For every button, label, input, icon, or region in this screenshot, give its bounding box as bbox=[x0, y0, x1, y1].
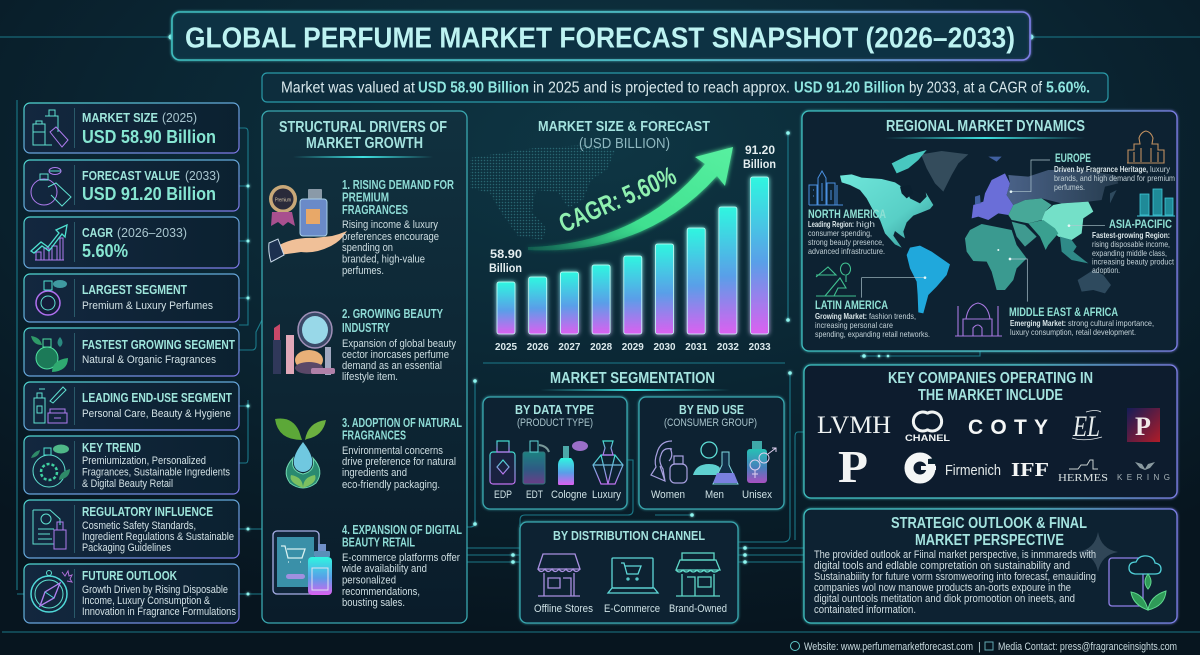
axis labels: 2032 bbox=[717, 341, 739, 353]
driver 4: wide availability and bbox=[341, 563, 427, 575]
driver 4: E-commerce platforms offer bbox=[342, 552, 460, 564]
driver 1: perfumes. bbox=[342, 265, 384, 277]
panel: regional market dynamics: ASIA-PACIFIC bbox=[1109, 219, 1172, 231]
logo: G mark bbox=[909, 457, 936, 479]
panel: key companies bbox=[804, 365, 1177, 498]
card: key trend: Premiumization, Personalized bbox=[82, 455, 206, 467]
panel: regional market dynamics: NORTH AMERICA bbox=[808, 209, 886, 221]
card: CAGR: CAGR bbox=[82, 226, 113, 240]
chart: market size and forecast: MARKET SIZE & FORECAST bbox=[538, 118, 710, 135]
driver 4: recommendations, bbox=[342, 586, 420, 598]
panel: by end use: Unisex bbox=[742, 489, 773, 501]
icon: e-commerce laptop bbox=[608, 558, 658, 593]
logo: Firmenich: Firmenich bbox=[945, 462, 1001, 479]
driver 1: Rising income & luxury bbox=[342, 219, 438, 231]
summary banner: by 2033, at a CAGR of bbox=[909, 80, 1043, 96]
panel: regional market dynamics: Growing Market: bbox=[815, 311, 867, 321]
driver 3: Environmental concerns bbox=[342, 445, 443, 457]
panel: regional market dynamics: brands, and high demand for premium bbox=[1054, 173, 1175, 183]
panel: regional market dynamics: REGIONAL MARKET DYNAMICS bbox=[886, 118, 1085, 135]
driver 2: 2. GROWING BEAUTY bbox=[342, 307, 444, 321]
card: forecast value: FORECAST VALUE bbox=[82, 169, 180, 183]
driver 3: eco-friendly packaging. bbox=[342, 479, 440, 491]
panel: by data type: Luxury bbox=[592, 489, 622, 501]
card: future outlook: Innovation in Fragrance Formulations bbox=[82, 606, 237, 618]
panel: regional market dynamics: increasing beauty product bbox=[1092, 256, 1175, 266]
driver 2: cector inorcases perfume bbox=[342, 349, 449, 361]
panel: regional market dynamics: consumer spending, bbox=[808, 228, 872, 238]
panel: regional market dynamics: increasing personal care bbox=[815, 320, 893, 330]
icon: unisex bbox=[747, 441, 776, 483]
driver 2 bbox=[273, 307, 456, 383]
footer contact bar: | bbox=[978, 641, 981, 653]
panel: strategic outlook: The provided outlook ar Fiinal market perspective, is inmmareds with bbox=[814, 549, 1096, 561]
logo: Chanel bbox=[905, 412, 950, 444]
driver 3: drive preference for natural bbox=[342, 456, 456, 468]
logo: Kering: KERING bbox=[1117, 473, 1170, 482]
driver 3 bbox=[275, 416, 462, 491]
panel: strategic outlook: Sustainabiiity for future vorm ssromweoring into forecast, emauiding bbox=[814, 571, 1096, 583]
driver 1: FRAGRANCES bbox=[342, 203, 408, 217]
panel: by data type: EDP bbox=[494, 489, 512, 501]
axis labels: 2025 bbox=[495, 341, 517, 353]
card: regulatory influence: REGULATORY INFLUENCE bbox=[82, 505, 213, 519]
panel: strategic outlook: STRATEGIC OUTLOOK & FINAL bbox=[891, 515, 1087, 532]
logo: Hermes bbox=[1058, 460, 1108, 484]
footer contact bar: Website: www.perfumemarketforecast.com bbox=[804, 641, 973, 653]
panel: market segmentation: MARKET SEGMENTATION bbox=[550, 370, 715, 387]
value labels: 91.20 bbox=[745, 143, 775, 157]
icon: EDT bottle bbox=[523, 441, 549, 484]
driver 3: FRAGRANCES bbox=[342, 428, 406, 442]
icon: EDP bottle bbox=[490, 441, 515, 484]
world map bbox=[840, 150, 1118, 313]
icon: leaf and water drop bbox=[275, 418, 326, 488]
footer contact bar bbox=[790, 641, 1177, 653]
card: key trend bbox=[24, 436, 239, 494]
driver 2: Expansion of global beauty bbox=[342, 338, 456, 350]
panel: regional market dynamics: expanding middle class, bbox=[1092, 248, 1167, 258]
panel: regional market dynamics: MIDDLE EAST & AFRICA bbox=[1009, 307, 1118, 319]
chart: market size and forecast bbox=[470, 118, 778, 353]
card: forecast value: USD 91.20 Billion bbox=[82, 184, 216, 204]
panel: by end use: BY END USE bbox=[679, 403, 744, 417]
card: future outlook: FUTURE OUTLOOK bbox=[82, 569, 177, 583]
panel: by data type: Cologne bbox=[551, 489, 587, 501]
driver 4: 4. EXPANSION OF DIGITAL bbox=[342, 523, 462, 537]
logo: Kering bbox=[1117, 462, 1170, 482]
driver 4: personalized bbox=[342, 574, 396, 586]
icon: asia skyline bbox=[1140, 189, 1173, 215]
axis labels: 2031 bbox=[685, 341, 707, 353]
panel: strategic outlook: digital ountools metitation and diok promootion on ineets, and bbox=[814, 593, 1075, 605]
driver 1: preferences encourage bbox=[342, 231, 439, 243]
icon: brand-owned store bbox=[676, 553, 720, 596]
logo: Hermes: HERMES bbox=[1058, 473, 1108, 484]
logo: IFF: IFF bbox=[1011, 459, 1049, 481]
driver 1: spending on bbox=[342, 242, 393, 254]
panel: regional market dynamics: spending, expanding retail networks. bbox=[815, 329, 930, 339]
icon: women bbox=[651, 441, 687, 483]
card: fastest growing: Natural & Organic Fragrances bbox=[82, 354, 217, 366]
panel: by end use: Men bbox=[705, 489, 724, 501]
panel: strategic outlook: containated information. bbox=[814, 604, 916, 616]
logo: P box: P bbox=[1135, 412, 1151, 441]
icon: offline store bbox=[538, 554, 580, 596]
panel: regional market dynamics: Driven by Fragrance Heritage, bbox=[1054, 164, 1148, 174]
card: leading end-use: LEADING END-USE SEGMENT bbox=[82, 391, 232, 405]
logo: EL monogram: EL bbox=[1072, 410, 1100, 443]
driver 2: lifestyle item. bbox=[342, 371, 398, 383]
card: market size: USD 58.90 Billion bbox=[82, 127, 216, 147]
icon: men bbox=[693, 442, 738, 484]
axis labels: 2029 bbox=[622, 341, 644, 353]
axis labels: 2028 bbox=[590, 341, 612, 353]
driver 4: BEAUTY RETAIL bbox=[342, 536, 415, 550]
logo: P box bbox=[1127, 408, 1160, 442]
panel: structural drivers: STRUCTURAL DRIVERS OF bbox=[279, 119, 447, 136]
driver 1: 1. RISING DEMAND FOR bbox=[342, 178, 454, 192]
card: regulatory influence: Ingredient Regulations & Sustainable bbox=[82, 531, 234, 543]
logo: large P: P bbox=[838, 441, 868, 492]
summary banner: USD 58.90 Billion bbox=[418, 80, 529, 96]
card: future outlook: Income, Luxury Consumption & bbox=[82, 595, 211, 607]
card: CAGR: (2026–2033) bbox=[117, 226, 187, 240]
panel: regional market dynamics: adoption. bbox=[1092, 265, 1120, 275]
driver 1 bbox=[269, 178, 454, 277]
panel: strategic outlook bbox=[804, 509, 1177, 623]
driver 4: bousting sales. bbox=[342, 597, 405, 609]
axis labels: 2027 bbox=[558, 341, 581, 353]
axis labels: 2030 bbox=[654, 341, 676, 353]
card: key trend: Fragrances, Sustainable Ingredients bbox=[82, 466, 231, 478]
panel: regional market dynamics: LATIN AMERICA bbox=[815, 300, 888, 312]
panel: by end use bbox=[639, 397, 784, 509]
summary banner: Market was valued at bbox=[281, 80, 416, 96]
panel: key companies: KEY COMPANIES OPERATING IN bbox=[888, 370, 1093, 387]
summary banner: in 2025 and is projected to reach approx. bbox=[533, 80, 790, 96]
axis labels bbox=[495, 341, 771, 353]
icon: hand holding perfume: Premium bbox=[275, 198, 291, 204]
driver 2: demand as an essential bbox=[342, 360, 442, 372]
decorative nodes bbox=[168, 34, 1034, 596]
card: fastest growing bbox=[24, 328, 239, 376]
title banner bbox=[172, 12, 1030, 60]
panel: by data type bbox=[483, 397, 627, 509]
driver 1: branded, high-value bbox=[342, 254, 425, 266]
driver 4 bbox=[273, 523, 462, 609]
card: market size bbox=[24, 103, 239, 153]
logo: Coty: COTY bbox=[968, 416, 1048, 439]
panel: regional market dynamics: EUROPE bbox=[1055, 153, 1091, 165]
panel: regional market dynamics: strong cultural importance, bbox=[1068, 318, 1154, 328]
card: largest segment bbox=[24, 274, 239, 322]
panel: by distribution channel: E-Commerce bbox=[604, 603, 660, 615]
icon: makeup set bbox=[273, 312, 335, 375]
driver 2: INDUSTRY bbox=[342, 321, 390, 335]
icon: europe landmark bbox=[1127, 131, 1164, 163]
card: CAGR bbox=[24, 217, 239, 268]
panel: regional market dynamics: Leading Region: bbox=[808, 219, 854, 229]
panel: key stat cards bbox=[24, 103, 239, 623]
dotted background map bbox=[470, 145, 615, 240]
card: key trend: & Digital Beauty Retail bbox=[82, 478, 173, 490]
card: regulatory influence: Packaging Guidelines bbox=[82, 542, 172, 554]
panel: regional market dynamics: Emerging Market: bbox=[1010, 318, 1066, 328]
panel: by data type: (PRODUCT TYPE) bbox=[517, 417, 593, 429]
card: forecast value: (2033) bbox=[185, 169, 220, 183]
icon: cologne bottle bbox=[558, 441, 588, 485]
driver 3: 3. ADOPTION OF NATURAL bbox=[342, 416, 462, 430]
panel: structural drivers: MARKET GROWTH bbox=[306, 135, 423, 152]
icon: middle east mosque bbox=[955, 303, 1002, 336]
panel: regional market dynamics: rising disposable income, bbox=[1092, 239, 1170, 249]
panel: regional market dynamics: luxury consumption, retail development. bbox=[1010, 327, 1136, 337]
panel: by distribution channel: Offline Stores bbox=[534, 603, 594, 615]
card: market size: MARKET SIZE bbox=[82, 111, 158, 125]
panel: key companies: THE MARKET INCLUDE bbox=[918, 387, 1063, 404]
card: market size: (2025) bbox=[162, 111, 197, 125]
arrow: CAGR growth bbox=[528, 147, 733, 250]
panel: by data type: EDT bbox=[526, 489, 543, 501]
panel: regional market dynamics: high bbox=[856, 219, 875, 229]
panel: regional market dynamics: Fastest-growing Region: bbox=[1092, 230, 1170, 240]
value labels: Billion bbox=[489, 261, 522, 275]
driver 1: PREMIUM bbox=[342, 190, 389, 204]
panel: strategic outlook: digital tools and edlable compretation on sustainability and bbox=[814, 560, 1070, 572]
panel: strategic outlook: MARKET PERSPECTIVE bbox=[915, 532, 1064, 549]
logo: LVMH: LVMH bbox=[817, 412, 891, 439]
card: largest segment: LARGEST SEGMENT bbox=[82, 283, 187, 297]
card: key trend: KEY TREND bbox=[82, 441, 141, 455]
driver 3: ingredients and bbox=[342, 467, 407, 479]
icon: hand holding perfume bbox=[269, 185, 347, 262]
chart: market size and forecast: (USD BILLION) bbox=[579, 136, 670, 152]
card: forecast value bbox=[24, 160, 239, 211]
value labels: 58.90 bbox=[490, 247, 522, 261]
card: leading end-use bbox=[24, 382, 239, 430]
summary banner bbox=[262, 73, 1108, 102]
card: leading end-use: Personal Care, Beauty & Hygiene bbox=[82, 408, 231, 420]
logo: Chanel: CHANEL bbox=[905, 433, 950, 444]
panel: regional market dynamics: fashion trends, bbox=[869, 311, 916, 321]
icon: tablet and bottle bbox=[273, 531, 332, 595]
panel: by distribution channel: Brand-Owned bbox=[669, 603, 727, 615]
icon: luxury bottle bbox=[593, 441, 623, 484]
value labels bbox=[489, 143, 776, 275]
panel: market segmentation bbox=[483, 370, 784, 623]
card: largest segment: Premium & Luxury Perfumes bbox=[82, 300, 214, 312]
summary banner: USD 91.20 Billion bbox=[794, 80, 905, 96]
card: CAGR: 5.60% bbox=[82, 241, 128, 261]
panel: by data type: BY DATA TYPE bbox=[515, 403, 594, 417]
icon: north america skyline bbox=[809, 171, 843, 205]
panel: regional market dynamics: advanced infrastructure. bbox=[808, 246, 885, 256]
card: fastest growing: FASTEST GROWING SEGMENT bbox=[82, 338, 235, 352]
title banner: GLOBAL PERFUME MARKET FORECAST SNAPSHOT (2026–2033) bbox=[185, 22, 1015, 54]
axis labels: 2033 bbox=[749, 341, 771, 353]
CAGR label: CAGR: 5.60% bbox=[554, 160, 681, 238]
card: future outlook: Growth Driven by Rising Disposable bbox=[82, 584, 228, 596]
axis labels: 2026 bbox=[527, 341, 549, 353]
panel: by distribution channel: BY DISTRIBUTION CHANNEL bbox=[553, 529, 705, 543]
panel: regional market dynamics: strong beauty presence, bbox=[808, 237, 884, 247]
panel: by distribution channel bbox=[520, 522, 738, 623]
card: future outlook bbox=[24, 564, 239, 623]
icon: latin america landscape bbox=[816, 263, 856, 296]
panel: regional market dynamics: perfumes. bbox=[1054, 182, 1085, 192]
panel: structural drivers bbox=[262, 111, 467, 623]
panel: regional market dynamics bbox=[802, 111, 1177, 351]
panel: by end use: (CONSUMER GROUP) bbox=[664, 417, 757, 429]
panel: by end use: Women bbox=[651, 489, 685, 501]
bars bbox=[497, 177, 769, 334]
summary banner: 5.60%. bbox=[1046, 80, 1090, 96]
icon: cloud tablet plant bbox=[1109, 556, 1166, 610]
card: regulatory influence bbox=[24, 500, 239, 558]
value labels: Billion bbox=[743, 157, 776, 171]
panel: strategic outlook: companies wol now manowe products an-oorts expoure in the bbox=[814, 582, 1071, 594]
card: regulatory influence: Cosmetic Safety Standards, bbox=[82, 520, 196, 532]
panel: regional market dynamics: luxury bbox=[1150, 164, 1171, 174]
